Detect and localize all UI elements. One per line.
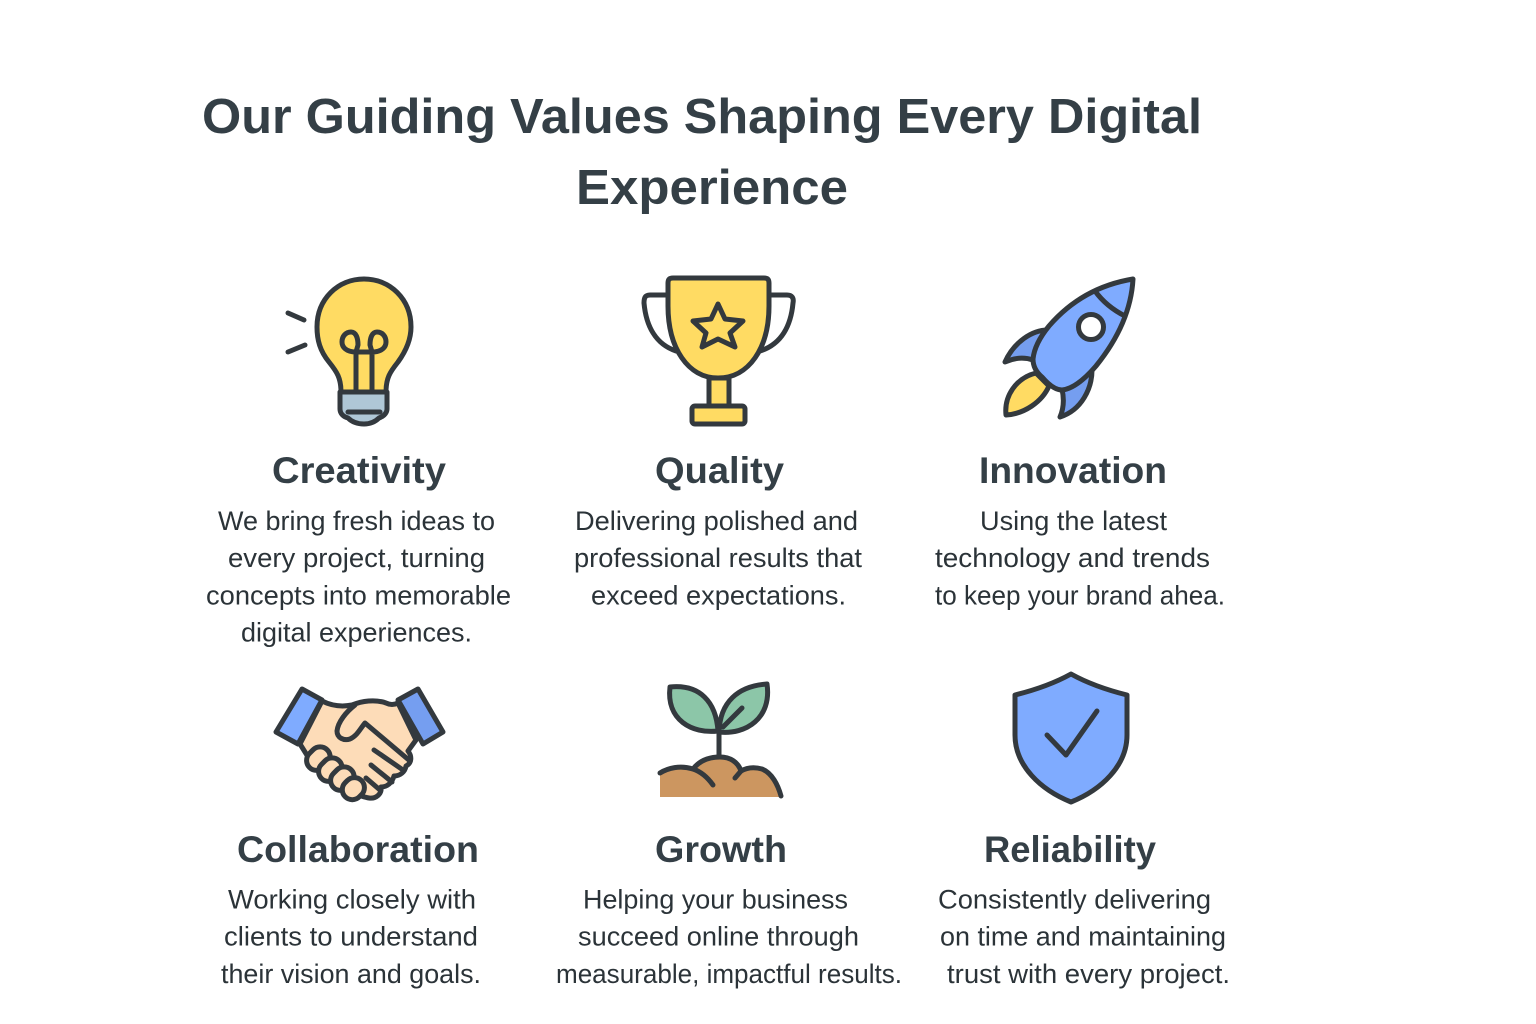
text: Growth description: measurable, impactful results. bbox=[556, 959, 902, 989]
icon: handshake bbox=[276, 689, 443, 804]
text: Collaboration description: clients to understand bbox=[224, 922, 478, 952]
text: Collaboration description: their vision and goals. bbox=[221, 959, 481, 989]
icon: shield bbox=[1015, 674, 1127, 802]
panel: creativity bbox=[206, 279, 511, 648]
panel: reliability bbox=[938, 674, 1230, 989]
text: Quality description: exceed expectations. bbox=[591, 580, 846, 610]
icon: trophy bbox=[644, 278, 793, 424]
text: Innovation description: technology and trends bbox=[935, 543, 1210, 573]
text: Quality description bbox=[574, 506, 862, 610]
text: Reliability description: trust with every project. bbox=[947, 959, 1230, 989]
text: Innovation description: Using the latest bbox=[980, 506, 1167, 536]
text: Collaboration description bbox=[221, 884, 481, 989]
text: Innovation description: to keep your brand ahea. bbox=[935, 580, 1225, 610]
text: Quality description: Delivering polished and bbox=[575, 506, 858, 536]
icon: sprout bbox=[660, 684, 782, 797]
text: Reliability description: Consistently delivering bbox=[938, 884, 1211, 914]
text: Creativity description: We bring fresh ideas to bbox=[218, 506, 495, 536]
text: Reliability description: on time and maintaining bbox=[940, 922, 1226, 952]
heading: Innovation: Innovation bbox=[979, 450, 1167, 491]
heading: Reliability: Reliability bbox=[984, 829, 1156, 870]
icon: light bulb bbox=[288, 279, 411, 424]
title: Our Guiding Values Shaping Every Digital bbox=[202, 90, 1202, 144]
panel: growth bbox=[556, 684, 902, 989]
text: Quality description: professional results that bbox=[574, 543, 862, 573]
text: Growth description: succeed online through bbox=[578, 922, 859, 952]
title bbox=[202, 90, 1202, 215]
text: Innovation description bbox=[935, 506, 1225, 610]
heading: Collaboration: Collaboration bbox=[237, 829, 479, 870]
title: Experience bbox=[576, 161, 848, 215]
text: Creativity description: digital experiences. bbox=[241, 618, 472, 648]
panel: collaboration bbox=[221, 689, 481, 989]
panel: innovation bbox=[935, 279, 1225, 610]
icon: rocket bbox=[1005, 279, 1133, 417]
text: Creativity description bbox=[206, 506, 511, 648]
text: Reliability description bbox=[938, 884, 1230, 989]
heading: Quality: Quality bbox=[655, 450, 784, 491]
heading: Creativity: Creativity bbox=[272, 450, 446, 491]
text: Collaboration description: Working closely with bbox=[228, 884, 476, 914]
text: Growth description bbox=[556, 884, 902, 989]
text: Growth description: Helping your business bbox=[583, 884, 848, 914]
text: Creativity description: concepts into memorable bbox=[206, 580, 511, 610]
text: Creativity description: every project, turning bbox=[228, 543, 485, 573]
panel: quality bbox=[574, 278, 862, 610]
heading: Growth: Growth bbox=[655, 829, 787, 870]
